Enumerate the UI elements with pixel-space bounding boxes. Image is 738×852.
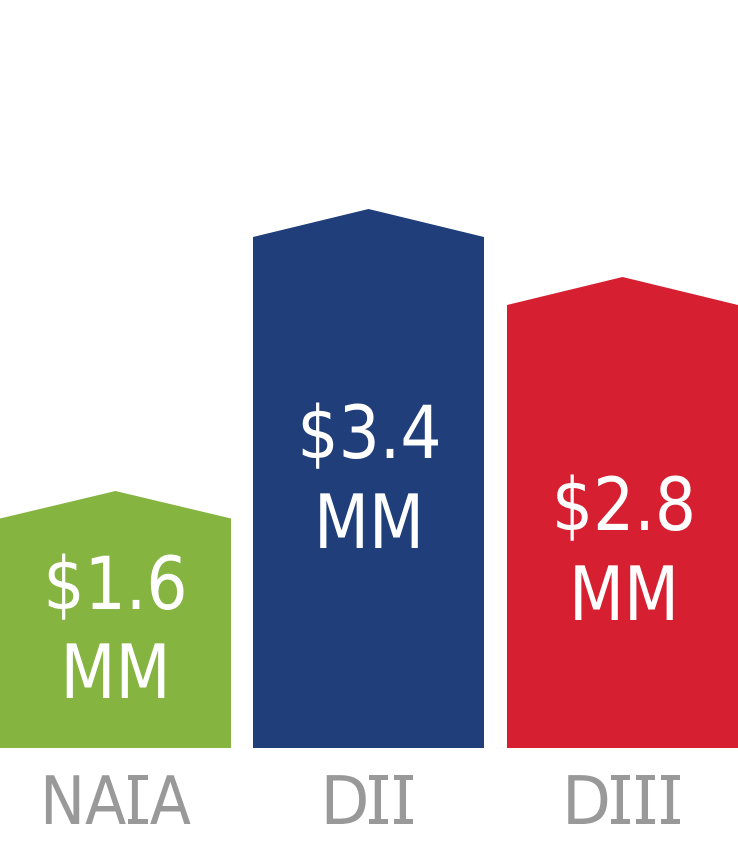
bar: DIII — [507, 277, 738, 748]
bar: DIII: MM — [569, 551, 679, 638]
bar: DIII: $2.8 — [552, 463, 696, 548]
bar: NAIA — [0, 491, 231, 748]
bar: DII — [253, 209, 484, 748]
label: DII: DII — [320, 762, 412, 840]
bar: DII: $3.4 — [297, 391, 442, 476]
label: NAIA: NAIA — [40, 763, 191, 841]
bar: NAIA: MM — [61, 629, 170, 716]
bar: DII: MM — [314, 479, 424, 566]
bar: NAIA: $1.6 — [43, 542, 188, 627]
label: DIII: DIII — [562, 762, 679, 840]
